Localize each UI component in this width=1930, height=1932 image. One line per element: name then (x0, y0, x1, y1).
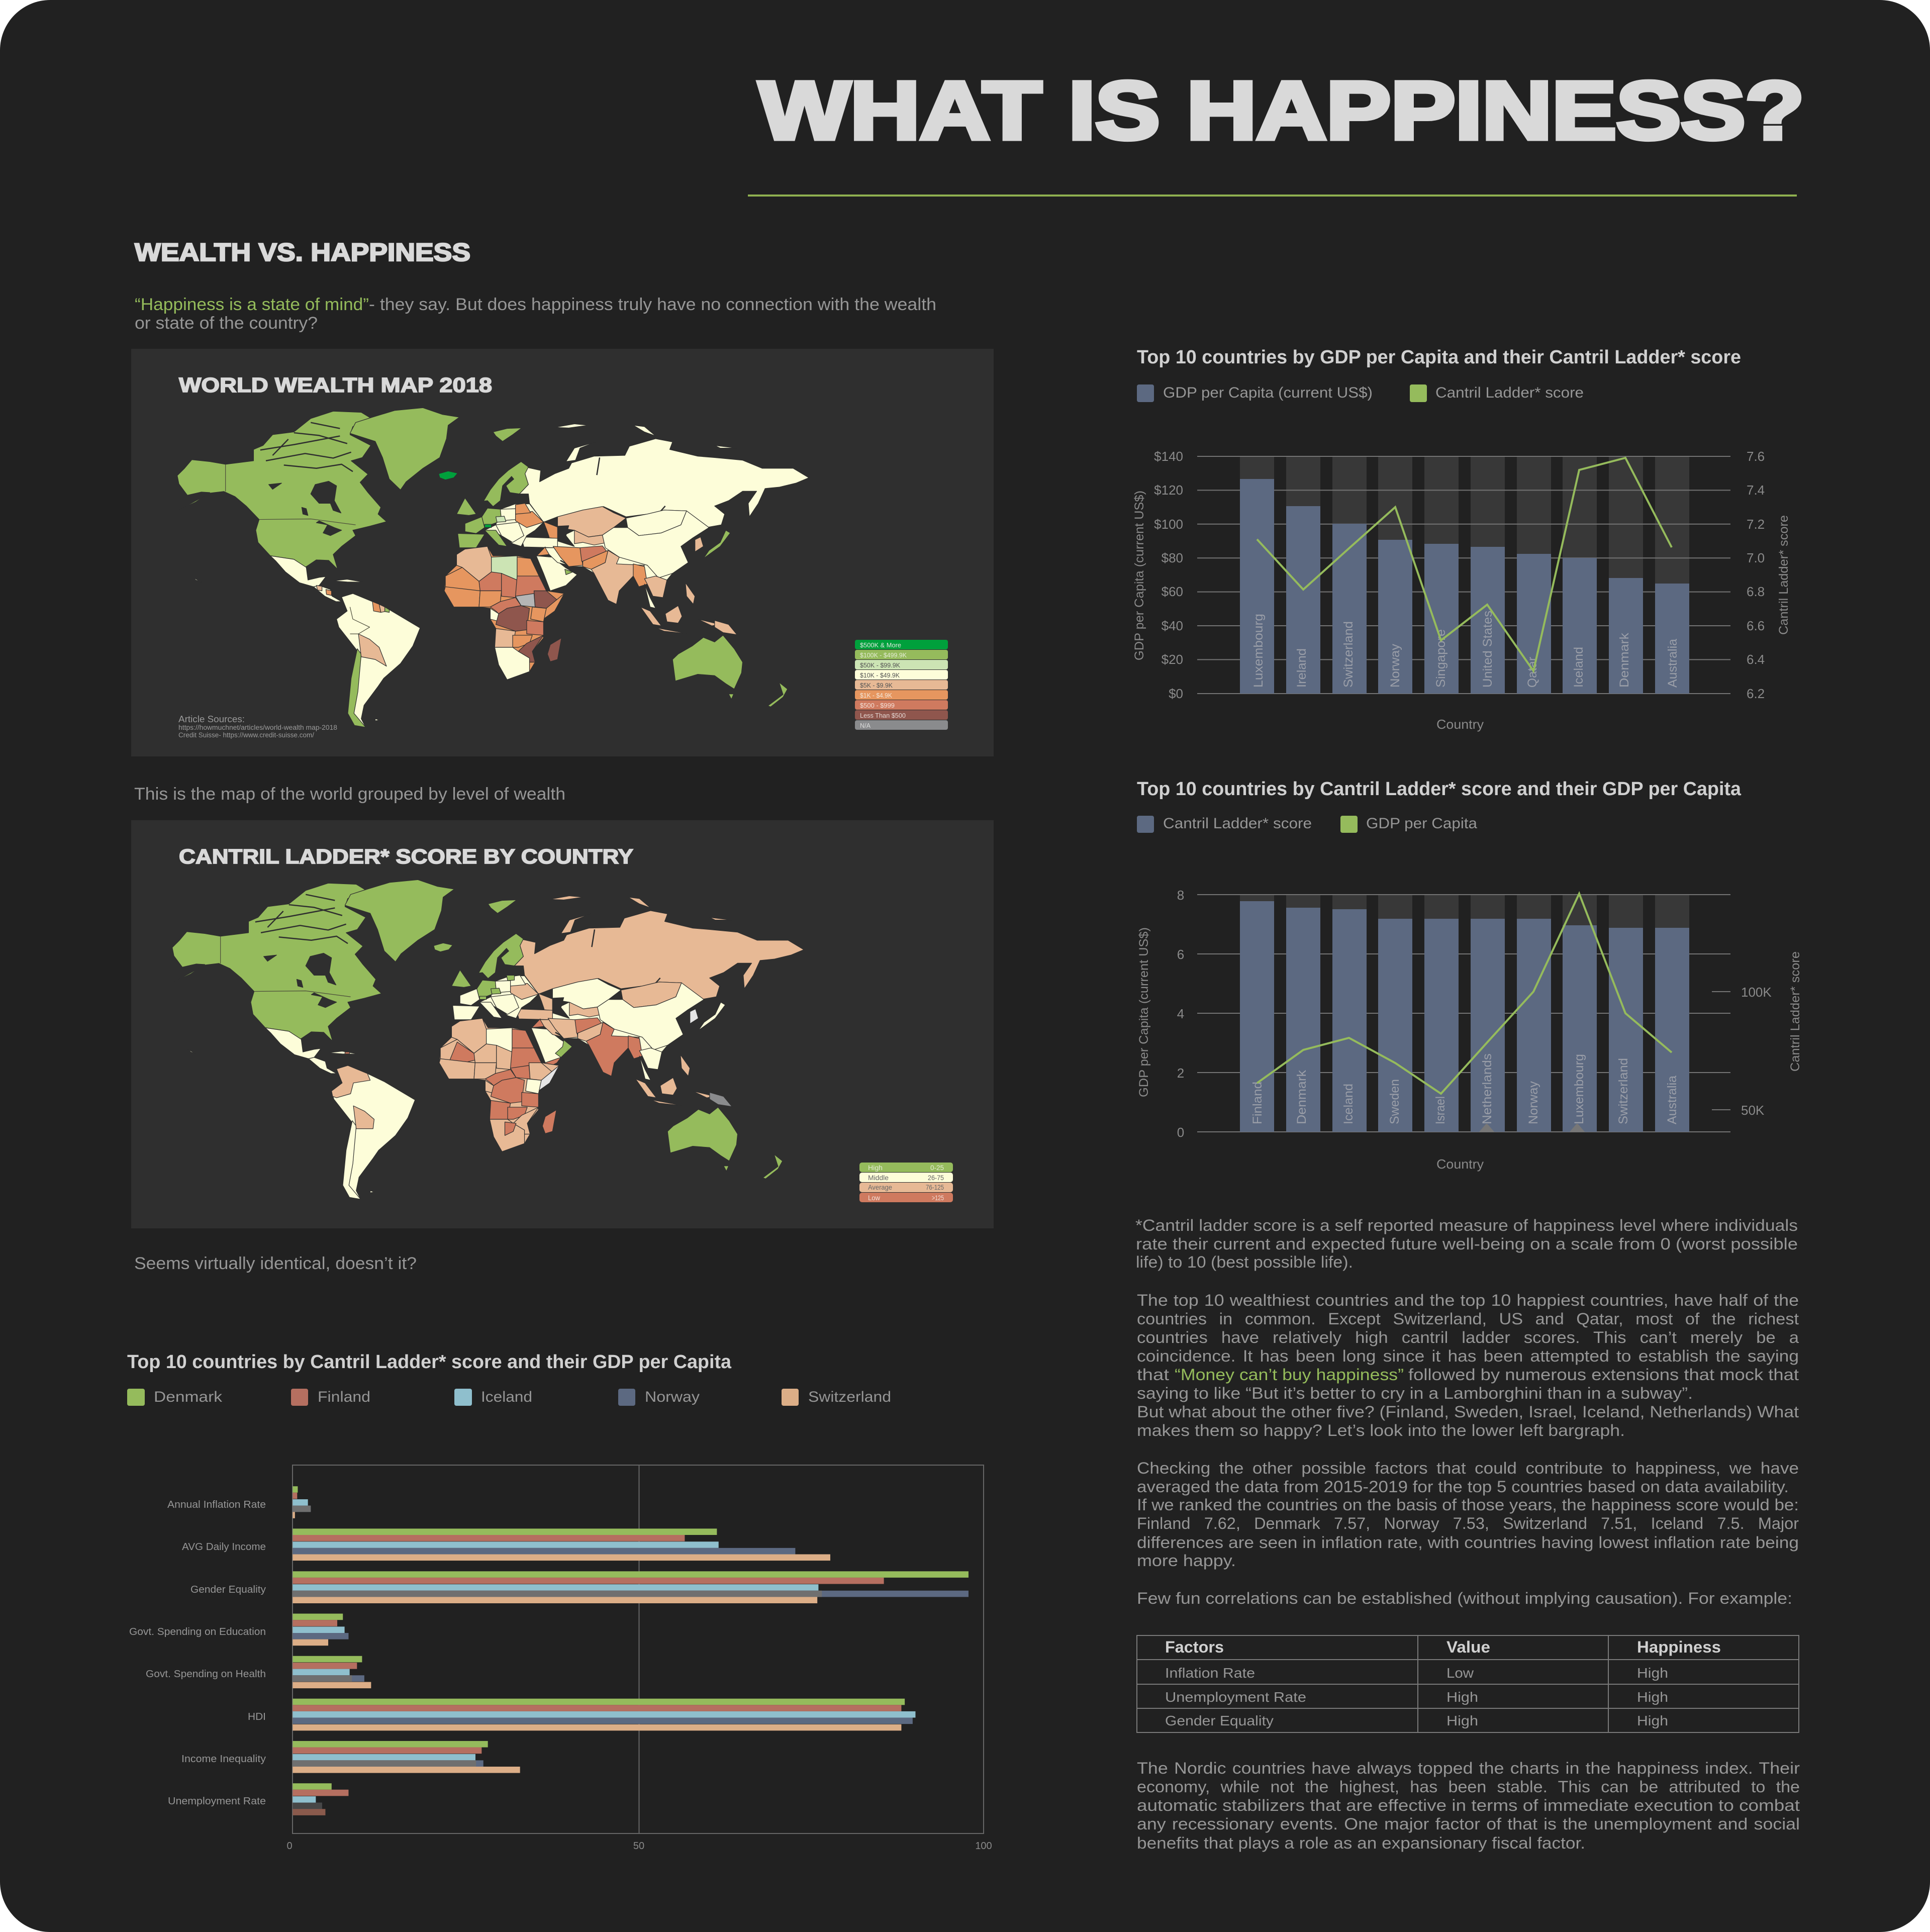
cantril line (1257, 458, 1672, 671)
country labels: Luxembourg (1572, 1054, 1586, 1124)
text: cantril definition (1135, 1216, 1798, 1271)
left axis labels: $40 (1162, 618, 1183, 633)
right axis labels: 6.6 (1747, 618, 1765, 633)
chart legend: Finland (318, 1389, 370, 1405)
table header: Happiness (1637, 1638, 1721, 1656)
left axis labels: $100 (1154, 517, 1183, 532)
intro text: - they say. But does happiness truly have no connection with the wealth (369, 295, 936, 314)
chart heading: Top 10 countries by GDP per Capita and their Cantril Ladder* score (1137, 347, 1741, 368)
chart legend (1137, 815, 1477, 833)
category labels: Govt. Spending on Education (129, 1626, 266, 1637)
legend: happiness bands: High (868, 1164, 883, 1172)
left axis labels: $120 (1154, 482, 1183, 498)
text: other factors paragraph: Finland 7.62, Denmark 7.57, Norway 7.53, Switzerland 7.51, Iceland 7.5. Major (1137, 1514, 1799, 1532)
chart legend: Iceland (481, 1389, 532, 1405)
intro text: or state of the country? (135, 314, 318, 333)
left axis labels: 6 (1177, 947, 1184, 962)
country labels: Switzerland (1341, 621, 1356, 688)
country labels: Denmark (1295, 1070, 1309, 1124)
chart legend: Cantril Ladder* score (1163, 815, 1312, 832)
text: nordic paragraph: benefits that plays a role as an expansionary fiscal factor. (1137, 1834, 1585, 1852)
table rows: High (1637, 1689, 1668, 1705)
table rows: Low (1446, 1665, 1474, 1681)
table header: Value (1446, 1638, 1490, 1656)
category labels: Unemployment Rate (168, 1796, 266, 1807)
chart: factors by country (127, 1351, 992, 1852)
article sources: Article Sources: (178, 714, 245, 724)
legend: happiness bands: >125 (932, 1194, 944, 1202)
legend: happiness bands (859, 1163, 953, 1202)
category labels: AVG Daily Income (182, 1541, 266, 1553)
chart legend: GDP per Capita (current US$) (1163, 384, 1373, 401)
legend: wealth bands: $50K - $99.9K (860, 661, 900, 669)
axis titles: Country (1436, 717, 1484, 732)
country labels: Finland (1250, 1082, 1265, 1124)
country labels: Norway (1388, 643, 1402, 688)
GDP line (1257, 894, 1672, 1094)
table header: Factors (1165, 1638, 1224, 1656)
intro text (135, 295, 936, 333)
legend: wealth bands: N/A (860, 722, 871, 729)
axis titles (1132, 491, 1791, 732)
country labels (1250, 1053, 1679, 1124)
text: analysis paragraph: saying to like “But it’s better to cry in a Lamborghini than in a subway”. (1137, 1384, 1693, 1402)
section heading: wealth vs happiness: WEALTH VS. HAPPINESS (135, 238, 470, 266)
country labels: Sweden (1388, 1079, 1402, 1124)
text: analysis paragraph: countries in common. Except Switzerland, US and Qatar, most of the richest (1137, 1310, 1799, 1328)
article sources: https://howmuchnet/articles/world-wealth map-2018 (178, 724, 337, 731)
text: other factors paragraph: differences are seen in inflation rate, with countries having lowest inflation rate being (1137, 1533, 1799, 1552)
score bars (1240, 901, 1689, 1132)
panel: cantril ladder map (131, 820, 994, 1228)
GDP bars (1240, 479, 1689, 694)
horizontal bars (293, 1486, 969, 1815)
right axis labels: 50K (1741, 1103, 1765, 1118)
table rows: Inflation Rate (1165, 1665, 1255, 1681)
legend: happiness bands: 26-75 (928, 1174, 944, 1182)
intro text: “Happiness is a state of mind” (135, 295, 369, 314)
right axis labels: 7.4 (1747, 482, 1765, 498)
left axis labels: 4 (1177, 1006, 1184, 1021)
legend: wealth bands: Less Than $500 (860, 712, 906, 719)
chart heading: Top 10 countries by Cantril Ladder* score and their GDP per Capita (127, 1351, 732, 1373)
text: other factors paragraph: Checking the other possible factors that could contribute to happiness, we have (1137, 1459, 1799, 1477)
chart legend: GDP per Capita (1366, 815, 1477, 832)
legend: wealth bands: $5K - $9.9K (860, 682, 893, 689)
map caption: This is the map of the world grouped by level of wealth (134, 785, 565, 804)
category labels: Gender Equality (190, 1584, 266, 1595)
left axis labels: $0 (1169, 686, 1183, 701)
right axis labels: 7.2 (1747, 517, 1765, 532)
country labels: Australia (1666, 639, 1680, 688)
x axis labels (286, 1841, 992, 1852)
country labels: Israel (1433, 1096, 1448, 1124)
table rows: High (1637, 1665, 1668, 1681)
x axis labels: 100 (975, 1841, 992, 1852)
heading: cantril ladder map: CANTRIL LADDER* SCORE BY COUNTRY (179, 845, 633, 868)
background bars (1240, 895, 1689, 1132)
legend: wealth bands: $100K - $499.9K (860, 651, 907, 659)
country labels: Luxembourg (1251, 614, 1266, 688)
right axis labels: 100K (1741, 985, 1772, 1000)
country labels: Singapore (1434, 629, 1448, 688)
country labels (1251, 611, 1680, 688)
heading: world wealth map: WORLD WEALTH MAP 2018 (179, 373, 492, 397)
map: cantril ladder score (172, 880, 804, 1199)
table rows: High (1446, 1713, 1478, 1728)
axis titles: Cantril Ladder* score (1777, 515, 1791, 635)
country labels: Norway (1526, 1081, 1540, 1124)
left axis labels (1154, 449, 1183, 701)
text: analysis paragraph: coincidence. It has been long since it has been attempted to establish the saying (1137, 1347, 1799, 1365)
country labels: Iceland (1341, 1084, 1356, 1124)
left axis labels: $80 (1162, 550, 1183, 565)
table rows: Unemployment Rate (1165, 1689, 1306, 1705)
panel: world wealth map (131, 349, 994, 756)
right axis labels: 6.2 (1747, 686, 1765, 701)
country labels: Iceland (1572, 647, 1586, 688)
x axis labels: 0 (286, 1841, 293, 1852)
country labels: Ireland (1295, 648, 1309, 688)
chart legend (127, 1389, 891, 1406)
text: nordic paragraph (1137, 1759, 1800, 1852)
text: other factors paragraph: If we ranked the countries on the basis of those years, the happiness score would be: (1137, 1496, 1799, 1514)
table header (1165, 1638, 1721, 1656)
legend: wealth bands: $500K & More (860, 641, 901, 649)
legend: happiness bands: 76-125 (926, 1183, 944, 1191)
background bars (1240, 456, 1689, 694)
chart: top 10 by GDP per capita (1132, 347, 1791, 732)
article sources: Credit Suisse- https://www.credit-suisse.com/ (178, 731, 314, 739)
category labels: HDI (248, 1711, 266, 1722)
right axis labels: 6.4 (1747, 652, 1765, 667)
text: analysis paragraph: But what about the other five? (Finland, Sweden, Israel, Iceland, Netherlands) What (1137, 1403, 1799, 1421)
title: WHAT IS HAPPINESS? (759, 64, 1804, 156)
axis titles: Country (1436, 1156, 1484, 1172)
right axis labels: 6.8 (1747, 584, 1765, 599)
country labels: Denmark (1617, 632, 1631, 688)
left axis labels: 8 (1177, 888, 1184, 903)
axis titles: Cantril Ladder* score (1788, 951, 1802, 1072)
legend: happiness bands: Middle (868, 1174, 889, 1182)
text: nordic paragraph: automatic stabilizers that are effective in terms of immediate execution to combat (1137, 1796, 1800, 1814)
text: cantril definition: life) to 10 (best possible life). (1136, 1253, 1353, 1271)
table rows: High (1637, 1713, 1668, 1728)
text: fun correlations: Few fun correlations can be established (without implying causation). For example: (1137, 1589, 1792, 1607)
chart legend: Switzerland (808, 1389, 891, 1405)
category labels: Annual Inflation Rate (167, 1499, 266, 1510)
text: cantril definition: *Cantril ladder score is a self reported measure of happiness level where individuals (1135, 1216, 1798, 1234)
chart legend: Cantril Ladder* score (1435, 384, 1584, 401)
left axis labels: $20 (1162, 652, 1183, 667)
article sources (178, 714, 337, 739)
map caption: Seems virtually identical, doesn’t it? (134, 1254, 417, 1273)
text: analysis paragraph: countries have relatively high cantril ladder scores. This can’t merely be a (1137, 1328, 1799, 1346)
right axis labels (1741, 985, 1772, 1118)
legend: wealth bands: $500 - $999 (860, 702, 895, 709)
country labels: Qatar (1525, 657, 1539, 688)
chart heading: Top 10 countries by Cantril Ladder* score and their GDP per Capita (1137, 779, 1742, 800)
left axis labels (1177, 888, 1184, 1140)
text: cantril definition: rate their current and expected future well-being on a scale from 0 (worst possible (1136, 1235, 1798, 1253)
table rows: Gender Equality (1165, 1713, 1274, 1728)
legend: happiness bands: Low (868, 1194, 881, 1202)
category labels: Income Inequality (181, 1754, 266, 1765)
left axis labels: $140 (1154, 449, 1183, 464)
left axis labels: $60 (1162, 584, 1183, 599)
text: analysis paragraph: “Money can’t buy happiness” (1175, 1366, 1404, 1384)
text: analysis paragraph: The top 10 wealthiest countries and the top 10 happiest countries, have half of the (1137, 1291, 1799, 1309)
left axis labels: 0 (1177, 1125, 1184, 1140)
legend: wealth bands: $10K - $49.9K (860, 671, 900, 679)
text: analysis paragraph (1137, 1291, 1799, 1439)
legend: happiness bands: Average (868, 1183, 892, 1191)
category labels (129, 1499, 266, 1807)
right axis labels: 7.6 (1747, 449, 1765, 464)
text: analysis paragraph: followed by numerous extensions that mock that (1408, 1366, 1799, 1384)
axis titles: GDP per Capita (current US$) (1137, 927, 1151, 1097)
left axis labels: 2 (1177, 1066, 1184, 1081)
text: other factors paragraph (1137, 1459, 1799, 1570)
country labels: Netherlands (1480, 1053, 1494, 1124)
right axis labels: 7.0 (1747, 550, 1765, 565)
right axis labels (1747, 449, 1765, 701)
chart legend (1137, 384, 1584, 402)
axis titles: GDP per Capita (current US$) (1132, 491, 1146, 660)
map: world wealth (177, 408, 809, 727)
category labels: Govt. Spending on Health (146, 1669, 266, 1680)
x axis labels: 50 (633, 1841, 644, 1852)
country labels: United States (1481, 611, 1495, 688)
table rows: High (1446, 1689, 1478, 1705)
text: other factors paragraph: averaged the data from 2015-2019 for the top 5 countries based on data availability. (1137, 1478, 1789, 1496)
country labels: Switzerland (1616, 1058, 1630, 1124)
legend: wealth bands (855, 640, 948, 730)
country labels: Australia (1665, 1076, 1679, 1124)
legend: wealth bands: $1K - $4.9K (860, 692, 892, 699)
text: other factors paragraph: more happy. (1137, 1552, 1236, 1570)
axis titles (1137, 927, 1802, 1172)
table rows (1165, 1665, 1668, 1728)
text: nordic paragraph: any recessionary events. One major factor of that is the unemployment and social (1137, 1815, 1800, 1833)
chart: top 10 by cantril score (1137, 779, 1802, 1172)
chart legend: Norway (645, 1389, 700, 1405)
text: analysis paragraph: makes them so happy? Let’s look into the lower left bargraph. (1137, 1421, 1625, 1439)
table: correlations (1137, 1635, 1799, 1732)
chart legend: Denmark (154, 1389, 223, 1405)
text: analysis paragraph: that (1137, 1366, 1169, 1384)
legend: happiness bands: 0-25 (930, 1164, 944, 1172)
text: nordic paragraph: The Nordic countries have always topped the charts in the happiness index. Their (1137, 1759, 1800, 1777)
text: nordic paragraph: economy, while not the highest, has been stable. This can be attributed to the (1137, 1778, 1800, 1796)
